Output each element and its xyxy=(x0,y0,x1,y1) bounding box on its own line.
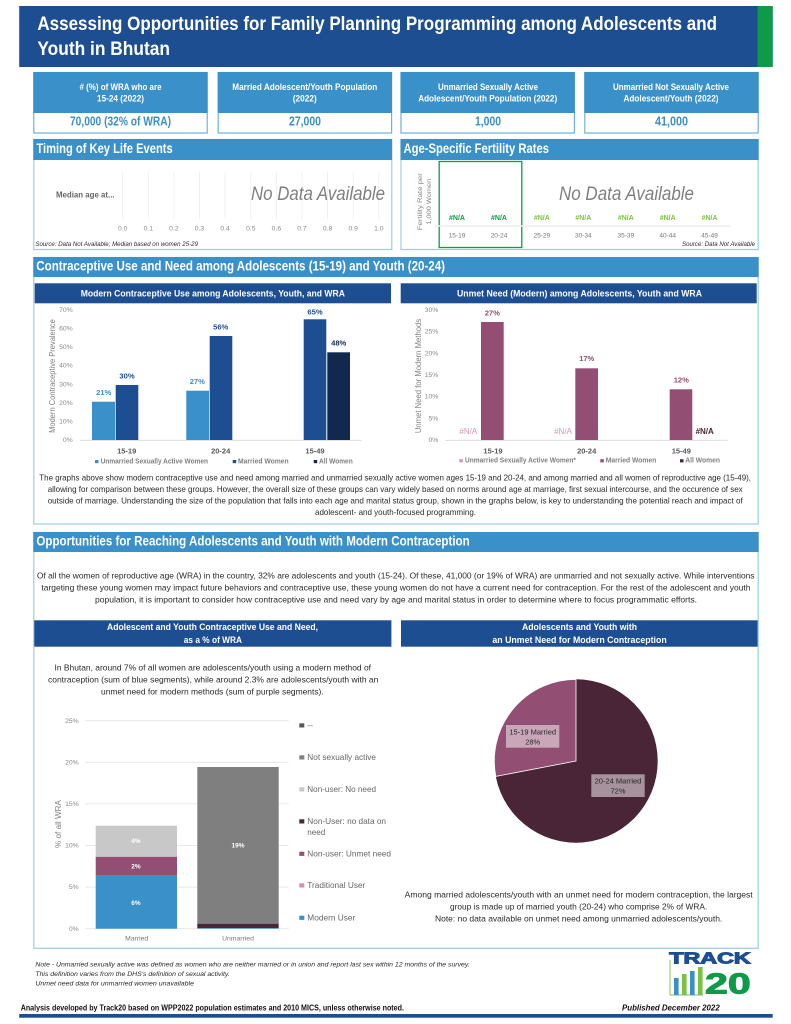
bar chart: modern contraceptive use: 0% xyxy=(63,437,73,444)
axis labels: timing chart: 0.3 xyxy=(195,226,204,233)
age group labels: 20-24 xyxy=(491,232,508,239)
data labels: #N/A: #N/A xyxy=(491,215,507,222)
explanatory text: The graphs above show modern contraceptive use and need among married and unmarried sexually active women ages 15-19 and 20-24, and among married and all women of reproductive age (15-49), xyxy=(39,474,751,483)
bar chart: modern contraceptive use: 60% xyxy=(59,326,73,333)
stacked bar chart: % of all WRA: % of all WRA xyxy=(53,800,63,848)
stat card: unmarried sexually active population xyxy=(400,72,575,133)
stacked bar chart: % of all WRA: 25% xyxy=(65,718,79,725)
data labels: #N/A: #N/A xyxy=(702,215,718,222)
stacked bar chart: % of all WRA: 0% xyxy=(69,926,79,933)
no data message: No Data Available xyxy=(559,184,694,205)
stacked bar chart: % of all WRA: 10% xyxy=(65,843,79,850)
bar chart: modern contraceptive use: 27% xyxy=(190,377,205,386)
legend: stacked chart: Traditional User xyxy=(307,880,365,890)
axis labels: timing chart: 1.0 xyxy=(374,226,384,233)
stat card: unmarried not sexually active: Adolescent/Youth (2022) xyxy=(624,94,718,104)
stat card: WRA aged 15-24: 70,000 (32% of WRA) xyxy=(70,114,171,128)
subheading: unmet need for modern contraception: an Unmet Need for Modern Contraception xyxy=(492,635,667,646)
bar chart: unmet need: 5% xyxy=(428,415,438,422)
age group labels: 35-39 xyxy=(617,232,634,239)
panel: age-specific fertility rates xyxy=(400,139,759,250)
stacked chart description: unmet need for modern methods (sum of purple segments). xyxy=(101,688,324,697)
bar chart: modern contraceptive use: 21% xyxy=(96,388,112,397)
stacked bar chart: % of all WRA: 6% xyxy=(131,900,141,907)
age group labels: 15-19 xyxy=(449,232,466,239)
bar chart: modern contraceptive use: 20% xyxy=(59,400,73,407)
stacked bar chart: % of all WRA: 5% xyxy=(69,884,79,891)
bar chart: unmet need: 15-19 xyxy=(483,446,503,455)
heading: age-specific fertility rates: Age-Specific Fertility Rates xyxy=(404,140,549,156)
legend: unmet need: Unmarried Sexually Active Women* xyxy=(465,457,576,464)
bar chart: unmet need: #N/A xyxy=(459,427,478,436)
attribution line: Analysis developed by Track20 based on WPP2022 population estimates and 2010 MICS, unless otherwise noted. xyxy=(21,1002,404,1012)
bar chart: modern contraceptive use: 30% xyxy=(59,381,73,388)
bar chart: modern contraceptive use: 70% xyxy=(59,307,73,314)
subheading: unmet need for modern contraception xyxy=(401,620,758,647)
title banner: Youth in Bhutan xyxy=(37,39,170,60)
title banner xyxy=(19,6,773,67)
stat card: unmarried not sexually active xyxy=(584,72,759,133)
panel: opportunities for reaching adolescents and youth xyxy=(33,532,759,948)
pie label: 20-24 married: 72% xyxy=(610,787,626,796)
stacked bar chart: % of all WRA: 4% xyxy=(131,838,141,845)
bar chart: unmet need: Unmet Need for Modern Methods xyxy=(413,319,423,433)
pie label: 15-19 married: 15-19 Married xyxy=(509,727,556,736)
axis labels: timing chart: 0.8 xyxy=(323,226,333,233)
stat card: married population: 27,000 xyxy=(289,114,321,128)
explanatory text: allowing for comparison between these groups. However, the overall size of these groups can vary widely based on norms around age at marriage, first sexual intercourse, and the occurence of sex xyxy=(48,485,743,494)
highlight box: ages 15-24 xyxy=(439,162,522,248)
legend: modern contraceptive use: Unmarried Sexually Active Women xyxy=(101,458,208,465)
data labels: #N/A: #N/A xyxy=(534,215,550,222)
legend: modern contraceptive use: Married Women xyxy=(238,458,289,465)
stacked bar chart: % of all WRA: 20% xyxy=(65,759,79,766)
data labels: #N/A: #N/A xyxy=(449,215,465,222)
axis labels: timing chart: 0.1 xyxy=(144,226,153,233)
legend: stacked chart: need xyxy=(307,827,326,837)
y-axis label: fertility rate xyxy=(417,172,433,230)
stacked bar chart: % of all WRA xyxy=(53,718,289,943)
data labels: #N/A xyxy=(449,215,718,222)
subheading: modern contraceptive use xyxy=(35,283,391,303)
subheading: unmet need xyxy=(401,283,757,303)
stat card: married population: (2022) xyxy=(293,94,317,104)
data labels: #N/A: #N/A xyxy=(618,215,634,222)
subheading: use and need as % of WRA: Adolescent and Youth Contraceptive Use and Need, xyxy=(107,622,318,633)
data labels: #N/A: #N/A xyxy=(660,215,676,222)
bar chart: modern contraceptive use: 15-19 xyxy=(117,446,136,455)
stacked bar chart: % of all WRA: Unmarried xyxy=(222,936,254,943)
stat card: WRA aged 15-24: 15-24 (2022) xyxy=(97,94,144,104)
legend: unmet need xyxy=(459,457,720,464)
stacked chart description: contraception (sum of blue segments), while around 2.3% are adolescents/youth with an xyxy=(48,676,379,685)
bar chart: modern contraceptive use: 65% xyxy=(307,307,323,316)
explanatory text: adolescent- and youth-focused programming. xyxy=(315,508,476,517)
bar chart: unmet need xyxy=(413,307,728,455)
logo: Track20: TRACK xyxy=(669,950,752,967)
pie chart description xyxy=(405,890,753,923)
bar chart: unmet need: 27% xyxy=(485,308,500,317)
subheading: modern contraceptive use: Modern Contraceptive Use among Adolescents, Youth, and WRA xyxy=(81,288,345,299)
logo: Track20: 20 xyxy=(705,968,751,1000)
category label: median age: Median age at... xyxy=(56,191,115,200)
age group labels: 30-34 xyxy=(575,232,592,239)
intro paragraph: targeting these young women may impact future behaviors and contraceptive use, these young women do not have a current need for contraception. For the rest of the adolescent and youth xyxy=(41,583,751,592)
y-axis label: fertility rate: 1,000 Women xyxy=(426,178,433,225)
legend: modern contraceptive use xyxy=(95,458,353,465)
bar chart: unmet need: 17% xyxy=(579,354,595,363)
logo: Track20 xyxy=(669,950,752,1000)
pie label: 15-19 married xyxy=(506,725,559,748)
stat card: unmarried not sexually active: 41,000 xyxy=(655,114,688,128)
axis labels: timing chart: 0.4 xyxy=(220,226,230,233)
bar chart: unmet need: 20-24 xyxy=(577,446,597,455)
axis labels: timing chart: 0.6 xyxy=(272,226,281,233)
pie label: 20-24 married: 20-24 Married xyxy=(595,777,641,786)
pie chart description: Note: no data available on unmet need among unmarried adolescents/youth. xyxy=(435,914,722,923)
bar chart: unmet need: 15-49 xyxy=(672,446,691,455)
stacked chart description xyxy=(48,664,379,697)
intro paragraph xyxy=(37,571,755,604)
stat card: unmarried sexually active population: Adolescent/Youth Population (2022) xyxy=(418,94,557,104)
data labels: #N/A: #N/A xyxy=(575,215,591,222)
footnotes: Note - Unmarried sexually active was defined as women who are neither married or in union and report last sex within 12 months of the survey. xyxy=(35,961,470,968)
no data message: No Data Available xyxy=(251,184,385,205)
bar chart: unmet need: 12% xyxy=(674,376,689,385)
stacked bar chart: % of all WRA: 15% xyxy=(65,801,79,808)
panel: contraceptive use and need xyxy=(33,257,759,524)
bar chart: unmet need: 0% xyxy=(428,437,438,444)
age group labels: 40-44 xyxy=(659,232,676,239)
publication date: Published December 2022 xyxy=(622,1002,720,1012)
legend: stacked chart: Not sexually active xyxy=(307,752,376,762)
stat card: WRA aged 15-24 xyxy=(33,72,208,133)
age group labels xyxy=(449,232,718,239)
stat card: unmarried sexually active population: Unmarried Sexually Active xyxy=(438,82,538,92)
bar chart: unmet need: 20% xyxy=(425,350,438,357)
stacked chart description: In Bhutan, around 7% of all women are adolescents/youth using a modern method of xyxy=(54,664,372,673)
bar chart: modern contraceptive use: 15-49 xyxy=(305,446,325,455)
footnotes: This definition varies from the DHS's definition of sexual activity. xyxy=(35,971,230,978)
subheading: use and need as % of WRA: as a % of WRA xyxy=(184,635,242,646)
source note: Source: Data Not Available xyxy=(682,241,755,248)
legend: unmet need: Married Women xyxy=(606,457,656,464)
stat card: WRA aged 15-24: # (%) of WRA who are xyxy=(80,82,162,92)
bar chart: modern contraceptive use: 20-24 xyxy=(211,446,231,455)
bar chart: unmet need: #N/A xyxy=(696,427,714,436)
footnotes: Unmet need data for unmarried women unavailable xyxy=(35,981,194,988)
heading: opportunities: Opportunities for Reaching Adolescents and Youth with Modern Contraception xyxy=(36,533,470,549)
subheading: unmet need: Unmet Need (Modern) among Adolescents, Youth and WRA xyxy=(457,288,702,299)
bar chart: modern contraceptive use: 56% xyxy=(213,322,229,331)
heading: timing of key life events: Timing of Key Life Events xyxy=(36,140,173,156)
bar chart: modern contraceptive use: Modern Contraceptive Prevalence xyxy=(47,319,57,433)
bar chart: unmet need: 10% xyxy=(425,394,438,401)
bar chart: modern contraceptive use xyxy=(47,307,362,455)
pie chart description: Among married adolescents/youth with an unmet need for modern contraception, the largest xyxy=(405,890,753,899)
axis labels: timing chart: 0.2 xyxy=(169,226,179,233)
pie label: 20-24 married xyxy=(591,774,645,797)
stat card: married population xyxy=(218,72,392,133)
legend: stacked chart: Non-user: Unmet need xyxy=(307,848,391,858)
bar chart: unmet need: #N/A xyxy=(554,427,573,436)
legend: stacked chart: Non-user: No need xyxy=(307,784,376,794)
stacked bar chart: % of all WRA: 2% xyxy=(131,863,141,870)
source note: Source: Data Not Available; Median based on women 25-29 xyxy=(35,241,198,248)
footer bar xyxy=(19,1014,773,1018)
stat card: married population: Married Adolescent/Youth Population xyxy=(232,82,377,92)
heading: contraceptive use and need: Contraceptive Use and Need among Adolescents (15-19) and Youth (20-24) xyxy=(36,257,445,273)
explanatory text xyxy=(39,474,751,517)
stat card: unmarried sexually active population: 1,000 xyxy=(475,114,501,128)
pie chart: unmet need by group xyxy=(494,679,658,843)
axis labels: timing chart: 0.7 xyxy=(297,226,307,233)
subheading: use and need as % of WRA xyxy=(34,620,391,647)
age group labels: 25-29 xyxy=(533,232,550,239)
bar chart: modern contraceptive use: 40% xyxy=(59,363,73,370)
bar chart: modern contraceptive use: 48% xyxy=(331,338,347,347)
y-axis label: fertility rate: Fertility Rate per xyxy=(417,172,424,230)
axis labels: timing chart: 0.5 xyxy=(246,226,256,233)
bar chart: modern contraceptive use: 50% xyxy=(59,344,73,351)
intro paragraph: Of all the women of reproductive age (WRA) in the country, 32% are adolescents and youth (15-24). Of these, 41,000 (or 19% of WRA) are unmarried and not sexually active. While interventions xyxy=(37,571,755,580)
legend: modern contraceptive use: All Women xyxy=(319,458,353,465)
axis labels: timing chart xyxy=(118,226,384,233)
legend: stacked chart xyxy=(299,720,391,922)
bar chart: unmet need: 30% xyxy=(425,307,438,314)
explanatory text: outside of marriage. Understanding the size of the population that falls into each age and marital status group, shown in the graphs below, is key to understanding the potential reach and impact of xyxy=(48,497,743,506)
intro paragraph: population, it is important to consider how contraceptive use and need vary by age and marital status in order to determine where to focus programmatic efforts. xyxy=(95,595,697,604)
subheading: unmet need for modern contraception: Adolescents and Youth with xyxy=(522,622,637,633)
legend: unmet need: All Women xyxy=(685,457,720,464)
legend: stacked chart: -- xyxy=(307,720,313,730)
title banner: Assessing Opportunities for Family Planning Programming among Adolescents and xyxy=(37,14,717,35)
stacked bar chart: % of all WRA: Married xyxy=(125,936,148,943)
legend: stacked chart: Non-User: no data on xyxy=(307,816,386,826)
axis labels: timing chart: 0.0 xyxy=(118,226,128,233)
legend: stacked chart: Modern User xyxy=(307,912,355,922)
axis labels: timing chart: 0.9 xyxy=(348,226,358,233)
bar chart: modern contraceptive use: 30% xyxy=(119,371,135,380)
panel: timing of key life events xyxy=(33,139,392,250)
bar chart: unmet need: 25% xyxy=(425,329,438,336)
bar chart: unmet need: 15% xyxy=(425,372,438,379)
age group labels: 45-49 xyxy=(701,232,718,239)
footnotes xyxy=(35,961,470,988)
bar chart: modern contraceptive use: 10% xyxy=(59,418,73,425)
stat card: unmarried not sexually active: Unmarried Not Sexually Active xyxy=(613,82,729,92)
pie label: 15-19 married: 28% xyxy=(525,737,541,746)
stacked bar chart: % of all WRA: 19% xyxy=(231,843,245,850)
pie chart description: group is made up of married youth (20-24) who comprise 2% of WRA. xyxy=(450,902,707,911)
